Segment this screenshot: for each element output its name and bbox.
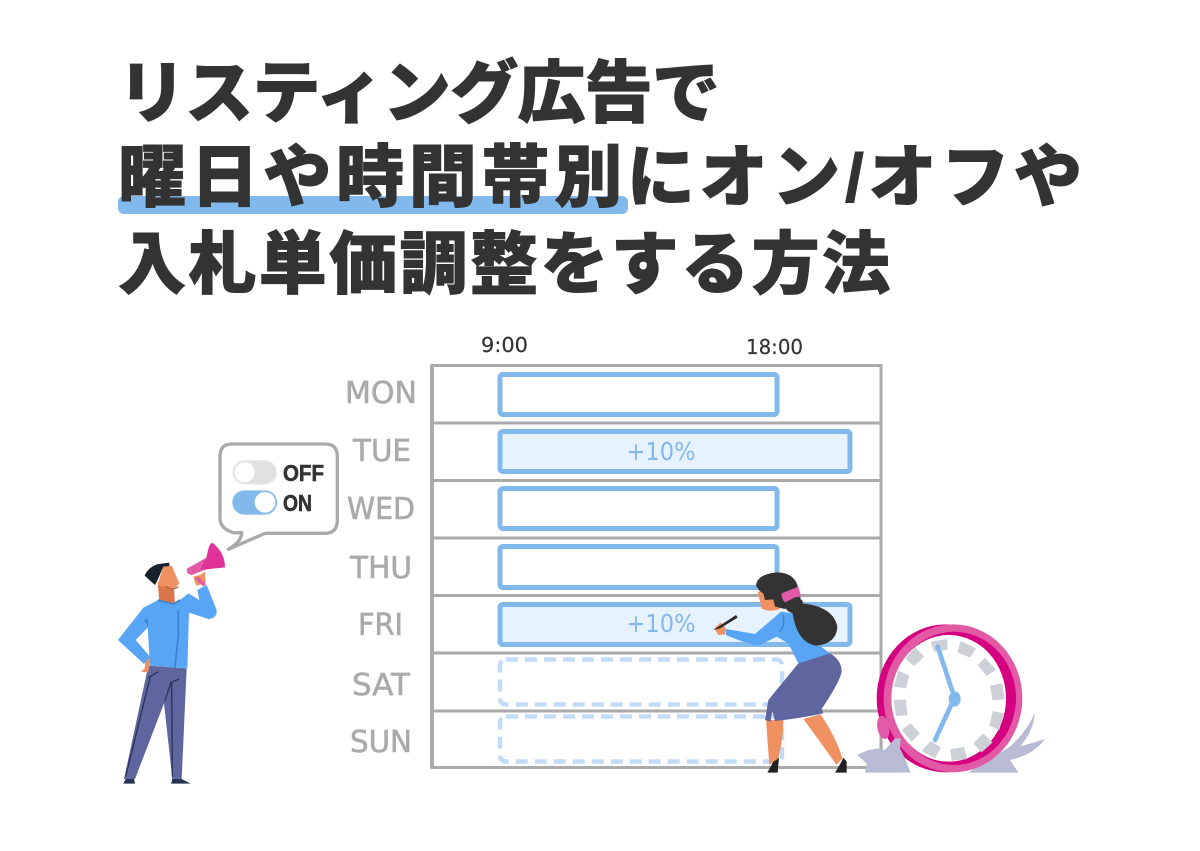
shoes (123, 779, 191, 784)
weekday labels: WED (347, 492, 415, 527)
weekday labels: SUN (350, 725, 412, 760)
hair (756, 572, 801, 609)
hair tie (782, 587, 801, 602)
hand and pen (713, 615, 738, 635)
toggle off: OFF (283, 460, 324, 486)
woman writing (713, 572, 847, 773)
left foliage (857, 738, 911, 773)
shirt (118, 585, 217, 668)
clock knob (875, 715, 891, 740)
weekday labels: THU (349, 551, 412, 586)
title: リスティング広告で (118, 56, 720, 132)
top (726, 612, 830, 663)
neck (158, 582, 175, 605)
title highlight (118, 196, 628, 214)
time labels (481, 333, 803, 359)
off-hours dashed bars (500, 660, 782, 762)
heels (767, 758, 847, 773)
bid adjustment labels: +10% (626, 609, 696, 638)
weekday labels: TUE (352, 434, 411, 469)
legs (766, 720, 783, 765)
trousers (124, 666, 187, 779)
clock ticks (893, 639, 1005, 761)
weekday labels: FRI (358, 608, 403, 643)
toggle on: ON (283, 490, 312, 516)
speech bubble with toggles (220, 444, 337, 549)
time labels: 9:00 (481, 333, 528, 357)
hand on hip (141, 657, 151, 672)
bid adjustment labels: +10% (626, 437, 696, 466)
title: 曜日や時間帯別にオン/オフや (118, 140, 1082, 216)
clock (875, 624, 1022, 772)
clock hands (935, 647, 952, 740)
schedule chart (345, 333, 881, 768)
weekday labels (345, 376, 417, 760)
megaphone hand (193, 572, 206, 586)
clock rim (877, 624, 1015, 772)
grid (432, 365, 881, 768)
man with megaphone (118, 543, 225, 784)
head (158, 566, 179, 588)
time labels: 18:00 (746, 335, 803, 359)
megaphone (187, 543, 225, 587)
hair (145, 563, 169, 585)
title: 入札単価調整をする方法 (118, 227, 890, 303)
weekday labels: SAT (352, 668, 411, 703)
right foliage (968, 713, 1045, 773)
bid adjustment labels (626, 437, 696, 638)
face (758, 588, 785, 611)
weekday labels: MON (345, 376, 417, 411)
schedule bars (500, 374, 850, 644)
title (118, 56, 1082, 303)
skirt (765, 653, 842, 722)
